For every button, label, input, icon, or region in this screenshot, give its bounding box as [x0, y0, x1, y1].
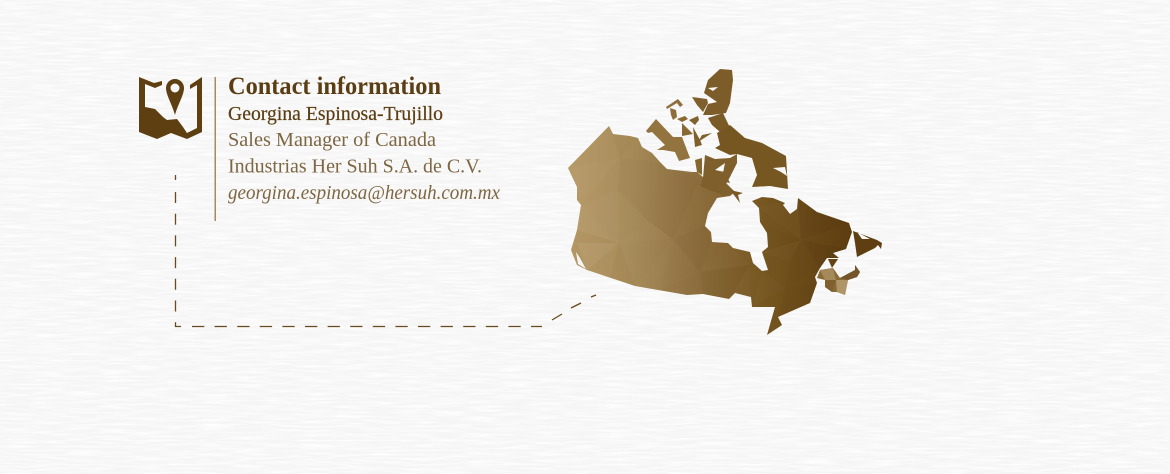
Baffin Island: [715, 125, 788, 189]
contact name: Georgina Espinosa-Trujillo: [228, 104, 443, 125]
west coast sliver: [576, 252, 586, 269]
Arctic islands: [646, 97, 732, 175]
email: georgina.espinosa@hersuh.com.mx: [228, 182, 500, 204]
icon: map with location pin: [139, 77, 202, 139]
low-poly facets: [578, 235, 618, 270]
job title: Sales Manager of Canada: [228, 129, 436, 151]
vertical divider: [214, 77, 216, 221]
Southampton Island: [730, 190, 743, 203]
map of Canada: [560, 69, 882, 340]
Gaspe Peninsula: [828, 259, 838, 268]
Ellesmere Island: [703, 69, 733, 115]
Melville Peninsula: [700, 154, 737, 196]
Newfoundland: [853, 231, 882, 257]
text block: contact details: [228, 71, 500, 204]
heading: Contact information: [228, 71, 441, 100]
company: Industrias Her Suh S.A. de C.V.: [228, 156, 482, 178]
dashed connector line: [176, 175, 596, 326]
Maritimes: [817, 265, 860, 295]
mainland: [568, 126, 852, 335]
